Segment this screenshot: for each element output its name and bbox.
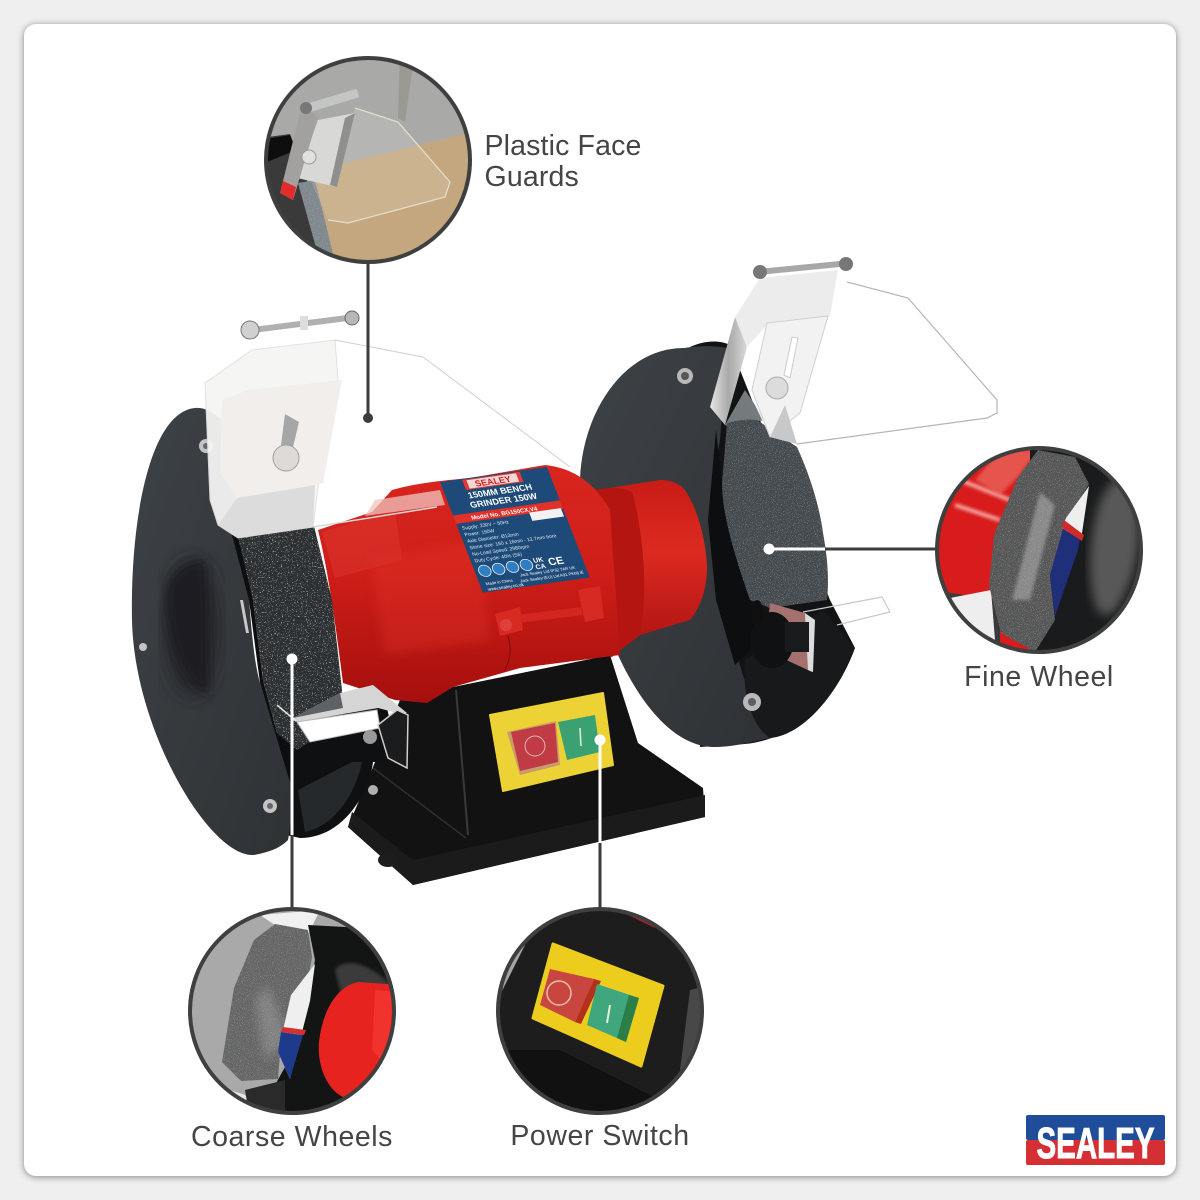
rest bracket [378, 710, 408, 768]
bolts on left disc [139, 439, 277, 813]
base front lip [348, 795, 705, 885]
label specs: Axle Diameter: Ø13mm [466, 532, 520, 545]
infographic canvas [132, 56, 1165, 1165]
base and pedestal [348, 655, 705, 885]
tool rest plate right [765, 603, 813, 672]
leader: coarse wheel [286, 654, 298, 908]
label footer: www.sealey.co.uk [487, 582, 525, 592]
grey area under right bracket [725, 390, 765, 426]
motor housing right cylinder [610, 480, 707, 658]
left tool rest [293, 685, 407, 722]
bench grinder product [132, 257, 997, 885]
label specs: Supply: 230V ~ 50Hz [461, 519, 510, 532]
motor carry handle [495, 586, 604, 670]
product specification label [440, 467, 590, 593]
safety icons [477, 559, 534, 577]
label title: 150MM BENCH [466, 482, 534, 500]
detail circle: power switch [496, 907, 704, 1115]
conformity marks [532, 554, 566, 571]
motor collar [590, 488, 644, 657]
left plastic face guard [205, 311, 570, 538]
left disc rear rim [277, 700, 400, 838]
motor highlights [322, 510, 402, 578]
label footer: Made in China [485, 578, 514, 586]
leader: power switch [594, 734, 606, 908]
label specs: Power: 150W [464, 528, 496, 538]
label footer: Jack Sealey (EU) Ltd A91 PK68 IE [519, 570, 585, 583]
left hub [232, 535, 297, 782]
label footer: Jack Sealey Ltd IP32 7AR UK [519, 565, 576, 577]
bolts on right disc [677, 368, 761, 711]
label: plastic face guards: Plastic Face [484, 130, 642, 162]
conformity marks: CA [535, 563, 547, 571]
label: coarse wheels: Coarse Wheels [191, 1121, 393, 1153]
right lower guard wedge [744, 610, 855, 738]
coarse wheel [238, 526, 343, 750]
motor main body [318, 465, 620, 703]
left disc guard [132, 408, 291, 855]
right tool rest [803, 597, 890, 625]
detail circle: plastic face guard [264, 56, 472, 264]
right wheel hub shadow [708, 430, 760, 665]
leader: fine wheel [764, 544, 936, 554]
label: plastic face guards: Guards [484, 161, 579, 193]
label: fine wheel: Fine Wheel [964, 661, 1114, 693]
right plastic face guard [710, 257, 997, 444]
label footer [483, 564, 586, 592]
detail circle: fine wheel [935, 446, 1143, 654]
conformity marks: CE [546, 555, 566, 568]
base foot [378, 853, 398, 867]
Sealey logo [1026, 1115, 1165, 1168]
label panel [440, 467, 590, 593]
label specs: Stone size: 150 x 16mm - 12.7mm bore [469, 533, 558, 551]
product specification label: Model No. BG150CX.V4 [471, 507, 539, 522]
label: power switch: Power Switch [510, 1120, 690, 1152]
power switch [490, 693, 613, 791]
dome of left disc [164, 560, 220, 696]
fine wheel [722, 420, 828, 608]
right disc guard [580, 346, 770, 747]
label specs: No-Load Speed: 2980rpm [471, 544, 530, 558]
label red band [453, 500, 563, 524]
label specs: Duty Cycle: 40% (S6) [474, 552, 524, 564]
product specification label: GRINDER 150W [468, 491, 539, 510]
detail circle: coarse wheels [185, 905, 400, 1120]
leader: plastic face guard [363, 263, 373, 423]
label specs [461, 514, 563, 564]
label logo [462, 472, 524, 490]
clamp knob [750, 600, 809, 668]
right disc guard rear rim [690, 341, 855, 747]
conformity marks: UK [532, 557, 545, 565]
product specification label: SEALEY [473, 474, 513, 489]
pedestal edge highlight [456, 690, 468, 835]
